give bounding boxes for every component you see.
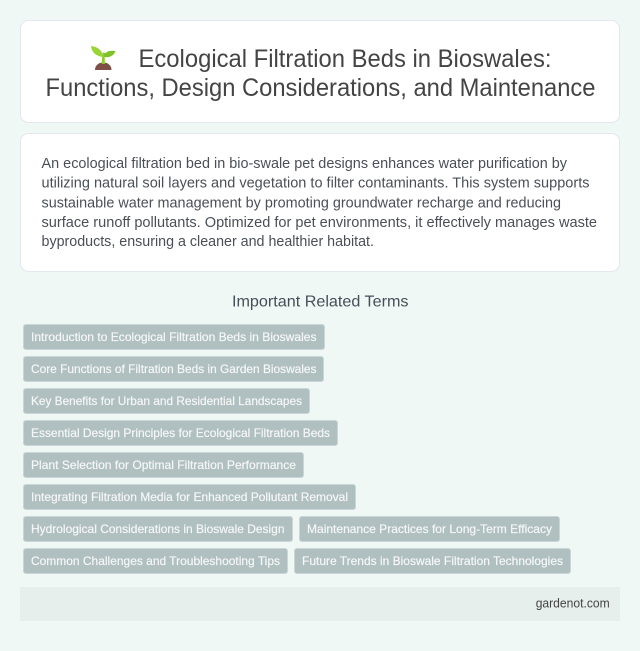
tag: Maintenance Practices for Long-Term Efficacy — [307, 522, 552, 536]
text block: description: sustainable water management by promoting groundwater recharge and reducing — [42, 194, 561, 212]
tag: Essential Design Principles for Ecological Filtration Beds — [31, 426, 330, 440]
tag — [24, 452, 304, 478]
panel: title card — [20, 20, 620, 122]
tag: Common Challenges and Troubleshooting Tips — [31, 554, 280, 568]
icon: seedling — [91, 46, 116, 70]
tag: Core Functions of Filtration Beds in Garden Bioswales — [31, 362, 316, 376]
tag: Hydrological Considerations in Bioswale Design — [31, 522, 284, 536]
title — [46, 45, 596, 102]
text block: description: byproducts, ensuring a cleaner and healthier habitat. — [42, 233, 374, 250]
tag — [24, 324, 324, 350]
tag: Introduction to Ecological Filtration Beds in Bioswales — [31, 330, 316, 344]
panel: term tags — [24, 324, 570, 574]
tag: Plant Selection for Optimal Filtration Performance — [31, 458, 296, 472]
tag: Key Benefits for Urban and Residential Landscapes — [31, 394, 302, 408]
tag — [24, 516, 292, 542]
text block: description: An ecological filtration bed in bio-swale pet designs enhances water purification by — [42, 155, 567, 172]
tag — [24, 388, 310, 414]
text block: description: surface runoff pollutants. Optimized for pet environments, it effectively manages waste — [42, 214, 597, 231]
text block: description — [42, 155, 597, 250]
tag — [300, 516, 560, 542]
tag — [294, 548, 570, 574]
heading: related terms: Important Related Terms — [232, 294, 408, 310]
tag — [24, 356, 324, 382]
panel: description — [20, 134, 620, 272]
title: Ecological Filtration Beds in Bioswales: — [138, 45, 552, 73]
footer — [20, 587, 620, 621]
tag — [24, 548, 288, 574]
tag: Integrating Filtration Media for Enhanced Pollutant Removal — [31, 490, 348, 504]
footer: gardenot.com — [536, 596, 610, 611]
tag — [24, 484, 356, 510]
tag: Future Trends in Bioswale Filtration Technologies — [302, 554, 563, 568]
text block: description: utilizing natural soil layers and vegetation to filter contaminants. This system supports — [42, 174, 590, 192]
tag — [24, 420, 338, 446]
title: Functions, Design Considerations, and Maintenance — [46, 74, 596, 102]
